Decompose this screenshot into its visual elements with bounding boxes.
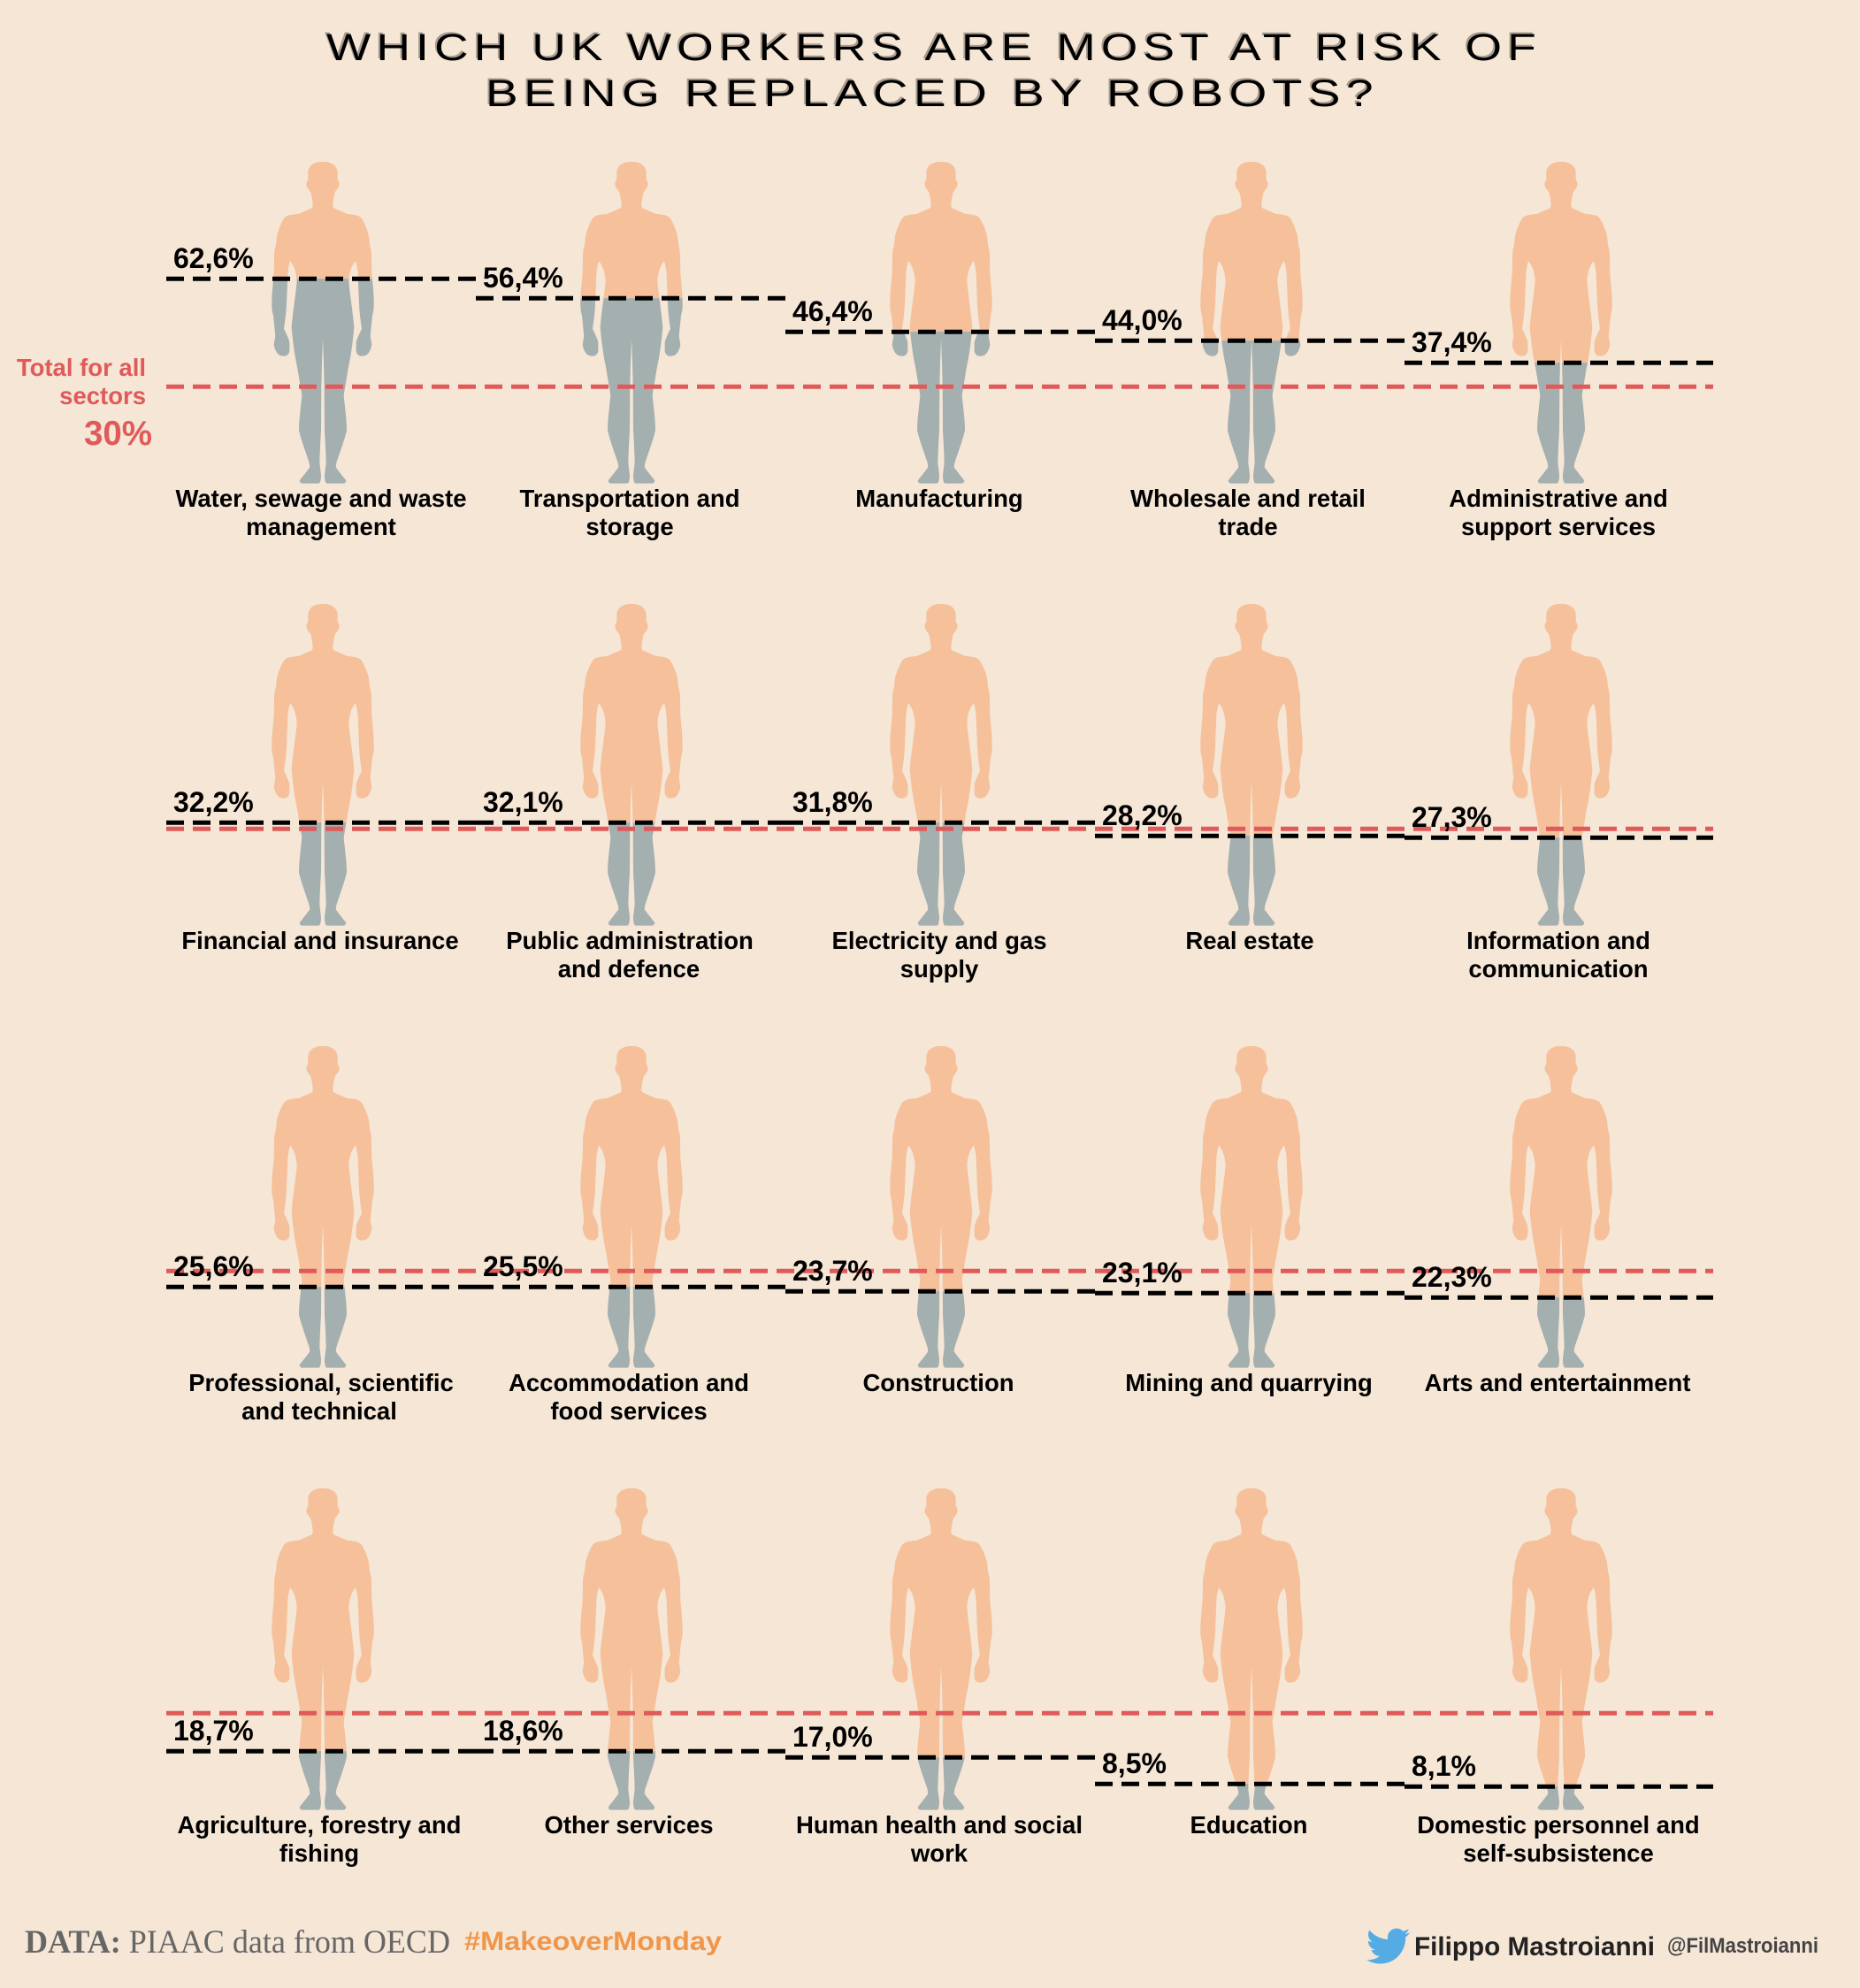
panel: Arts and entertainment: Arts and entertainment: [1424, 1369, 1691, 1396]
panel: Human health and social work: [785, 1488, 1095, 1988]
panel: Wholesale and retail trade: 44,0%: [1102, 304, 1183, 336]
figure 17,0%: [890, 1488, 992, 1810]
panel: Public administration and defence: and defence: [558, 955, 700, 983]
panel: Professional, scientific and technical: 25,6%: [173, 1250, 254, 1282]
panel: Administrative and support services: Administrative and: [1449, 485, 1668, 512]
figure 56,4%: [580, 162, 683, 484]
panel: Transportation and storage: 56,4%: [483, 262, 563, 294]
panel: Construction: 23,7%: [792, 1255, 873, 1287]
panel: Accommodation and food services: 25,5%: [483, 1250, 563, 1282]
panel: Transportation and storage: Transportation and: [519, 485, 740, 512]
panel: Manufacturing: [785, 162, 1095, 512]
panel: Human health and social work: work: [910, 1839, 968, 1867]
panel: Real estate: Real estate: [1185, 927, 1314, 954]
panel: Other services: Other services: [544, 1811, 714, 1839]
total reference label: 30%: [84, 415, 152, 453]
panel: Financial and insurance: 32,2%: [173, 786, 254, 818]
panel: Construction: [785, 1046, 1095, 1392]
panel: Water, sewage and waste management: 62,6%: [173, 242, 254, 274]
figure 8,5%: [1200, 1488, 1303, 1810]
panel: Construction: Construction: [862, 1369, 1014, 1396]
panel: Real estate: 28,2%: [1102, 799, 1183, 831]
panel: Domestic personnel and self-subsistence: self-subsistence: [1463, 1839, 1654, 1867]
figure 23,1%: [1200, 1046, 1303, 1368]
panel: Electricity and gas supply: Electricity and gas: [831, 927, 1047, 954]
panel: Professional, scientific and technical: Professional, scientific: [188, 1369, 454, 1396]
total reference label: [17, 354, 152, 453]
panel: Transportation and storage: [476, 162, 785, 540]
title: BEING REPLACED BY ROBOTS?: [484, 71, 1377, 113]
panel: Information and communication: 27,3%: [1412, 801, 1492, 833]
panel: Agriculture, forestry and fishing: [166, 1488, 476, 1987]
icon: twitter bird: [1366, 1929, 1410, 1964]
figure 28,2%: [1200, 604, 1303, 926]
panel: Mining and quarrying: Mining and quarrying: [1125, 1369, 1373, 1396]
total reference label: Total for all: [17, 354, 146, 381]
panel: Public administration and defence: Public administration: [506, 927, 754, 954]
figure 62,6%: [272, 162, 374, 484]
panel: Human health and social work: 17,0%: [792, 1721, 873, 1753]
figure 25,5%: [580, 1046, 683, 1368]
figure 18,7%: [272, 1488, 374, 1810]
panel: Accommodation and food services: food services: [550, 1397, 708, 1425]
total reference label: sectors: [59, 382, 146, 409]
panel: Arts and entertainment: [1405, 1046, 1713, 1392]
panel: Transportation and storage: storage: [586, 513, 674, 540]
author name: Filippo Mastroianni: [1414, 1932, 1655, 1961]
panel: Information and communication: Information and: [1466, 927, 1650, 954]
author handle: @FilMastroianni: [1667, 1934, 1818, 1958]
panel: Administrative and support services: support services: [1461, 513, 1656, 540]
panel: Real estate: [1095, 604, 1405, 950]
figure 27,3%: [1510, 604, 1612, 926]
panel: Electricity and gas supply: supply: [900, 955, 979, 983]
panel: Professional, scientific and technical: and technical: [241, 1397, 397, 1425]
figure 32,1%: [580, 604, 683, 926]
figure 25,6%: [272, 1046, 374, 1368]
panel: Wholesale and retail trade: [1095, 162, 1405, 577]
figure 37,4%: [1510, 162, 1612, 484]
panel: Domestic personnel and self-subsistence: Domestic personnel and: [1417, 1811, 1700, 1839]
panel: Public administration and defence: 32,1%: [483, 786, 563, 818]
figure 8,1%: [1510, 1488, 1612, 1810]
panel: Water, sewage and waste management: management: [246, 513, 396, 540]
figure 44,0%: [1200, 162, 1303, 484]
panel: Domestic personnel and self-subsistence: 8,1%: [1412, 1750, 1476, 1782]
panel: Wholesale and retail trade: Wholesale and retail: [1130, 485, 1366, 512]
panel: Other services: 18,6%: [483, 1715, 563, 1747]
panel: Agriculture, forestry and fishing: fishing: [279, 1839, 359, 1867]
panel: Mining and quarrying: [1095, 1046, 1405, 1396]
title: WHICH UK WORKERS ARE MOST AT RISK OF: [326, 27, 1542, 69]
panel: Arts and entertainment: 22,3%: [1412, 1261, 1492, 1293]
figure 23,7%: [890, 1046, 992, 1368]
panel: Manufacturing: 46,4%: [792, 295, 873, 327]
data source: DATA: PIAAC data from OECD: [25, 1924, 450, 1961]
figure 32,2%: [272, 604, 374, 926]
figure 31,8%: [890, 604, 992, 926]
panel: Agriculture, forestry and fishing: 18,7%: [173, 1715, 254, 1747]
panel: Human health and social work: Human health and social: [796, 1811, 1083, 1839]
panel: Domestic personnel and self-subsistence: [1405, 1488, 1713, 1862]
panel: Mining and quarrying: 23,1%: [1102, 1257, 1183, 1288]
figure 18,6%: [580, 1488, 683, 1810]
panel: Information and communication: communication: [1468, 955, 1649, 983]
panel: Wholesale and retail trade: trade: [1218, 513, 1278, 540]
panel: Administrative and support services: 37,4%: [1412, 326, 1492, 358]
panel: Education: Education: [1190, 1811, 1307, 1839]
figure 22,3%: [1510, 1046, 1612, 1368]
figure 46,4%: [890, 162, 992, 484]
title: BEING REPLACED BY ROBOTS?: [486, 73, 1379, 115]
title: WHICH UK WORKERS ARE MOST AT RISK OF: [325, 25, 1540, 67]
panel: Water, sewage and waste management: [166, 162, 476, 540]
panel: Information and communication: [1405, 604, 1713, 978]
panel: Education: [1095, 1488, 1405, 1988]
panel: Professional, scientific and technical: [166, 1046, 476, 1523]
panel: Agriculture, forestry and fishing: Agriculture, forestry and: [178, 1811, 461, 1839]
panel: Electricity and gas supply: 31,8%: [792, 786, 873, 818]
title: [325, 25, 1542, 115]
panel: Administrative and support services: [1405, 162, 1713, 540]
panel: Accommodation and food services: Accommodation and: [509, 1369, 749, 1396]
panel: Public administration and defence: [476, 604, 785, 978]
hashtag: #MakeoverMonday: [464, 1927, 722, 1956]
panel: Financial and insurance: [166, 604, 476, 950]
panel: Accommodation and food services: [476, 1046, 787, 1420]
panel: Water, sewage and waste management: Water, sewage and waste: [175, 485, 467, 512]
panel: Education: 8,5%: [1102, 1747, 1167, 1779]
panel: Financial and insurance: Financial and insurance: [181, 927, 459, 954]
panel: Electricity and gas supply: [785, 604, 1095, 983]
panel: Manufacturing: Manufacturing: [855, 485, 1023, 512]
panel: Other services: [476, 1488, 785, 1987]
